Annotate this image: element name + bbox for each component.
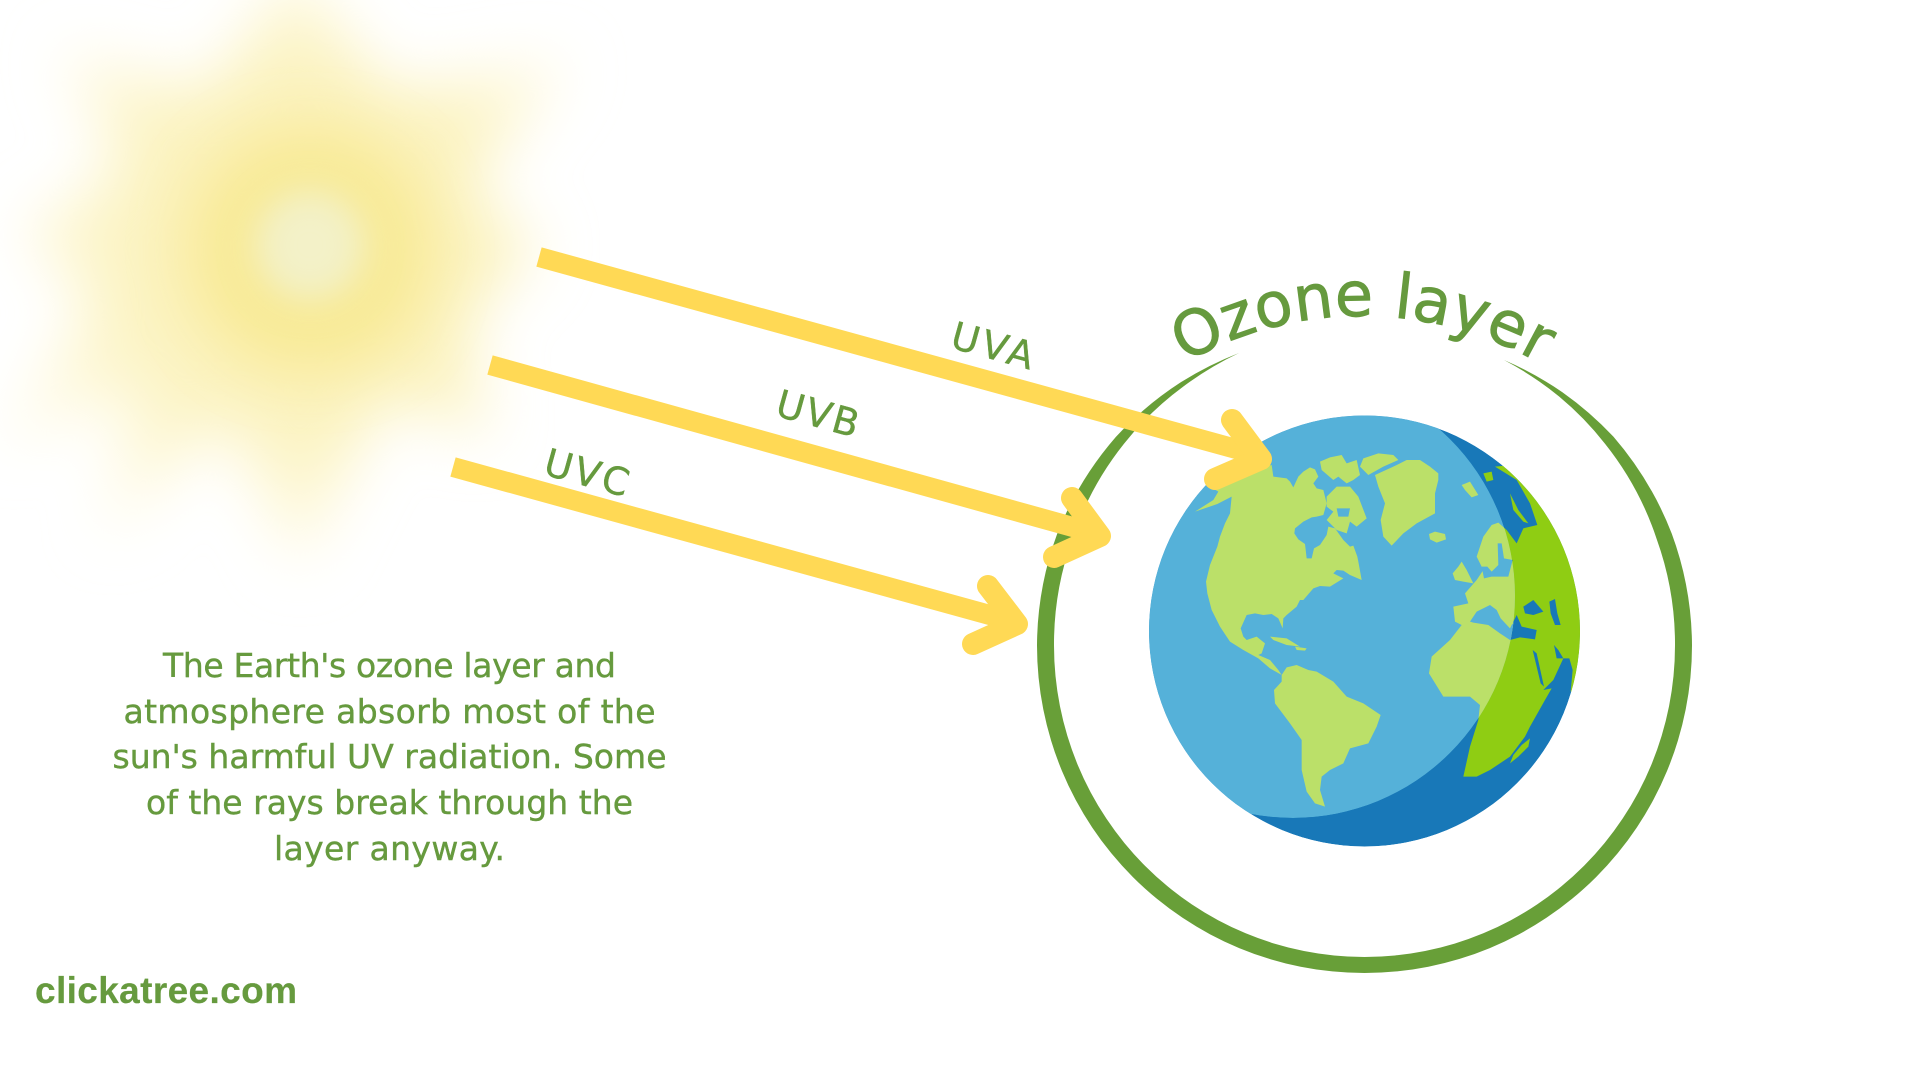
arrow: UVC bbox=[453, 467, 1017, 644]
body text: of the rays break through the bbox=[146, 783, 633, 822]
label: UVA: UVA bbox=[946, 314, 1039, 378]
earth globe bbox=[1149, 416, 1580, 846]
sun: mid glow bbox=[195, 135, 425, 365]
sun: pale core bbox=[255, 190, 365, 300]
ozone layer ring bbox=[1037, 353, 1692, 973]
earth: lit continents bbox=[1195, 453, 1515, 807]
body text: The Earth's ozone layer and bbox=[162, 646, 616, 685]
title: Ozone layer curved: Ozone layer bbox=[1174, 270, 1558, 358]
earth: lit seas bbox=[1336, 508, 1514, 640]
body text bbox=[112, 646, 666, 868]
label: UVC: UVC bbox=[539, 440, 634, 506]
earth: Italy bbox=[1512, 622, 1514, 625]
earth: dark ocean bbox=[1149, 415, 1580, 846]
earth: lit ocean bbox=[1149, 416, 1515, 818]
website: clickatree.com bbox=[35, 970, 297, 1011]
earth: shaded seas bbox=[1510, 560, 1564, 686]
earth: shaded continents bbox=[1463, 466, 1580, 777]
body text: layer anyway. bbox=[274, 829, 505, 868]
earth: lit hemisphere bbox=[1149, 416, 1515, 818]
sun bbox=[0, 0, 570, 570]
body text: sun's harmful UV radiation. Some bbox=[112, 737, 666, 776]
sun: outer rays glow bbox=[0, 0, 570, 570]
label: UVB: UVB bbox=[771, 382, 864, 446]
body text: atmosphere absorb most of the bbox=[124, 692, 656, 731]
arrow: UVB bbox=[490, 365, 1100, 557]
arrow: UVA bbox=[539, 257, 1261, 479]
title: Ozone layer curved bbox=[1174, 270, 1558, 358]
